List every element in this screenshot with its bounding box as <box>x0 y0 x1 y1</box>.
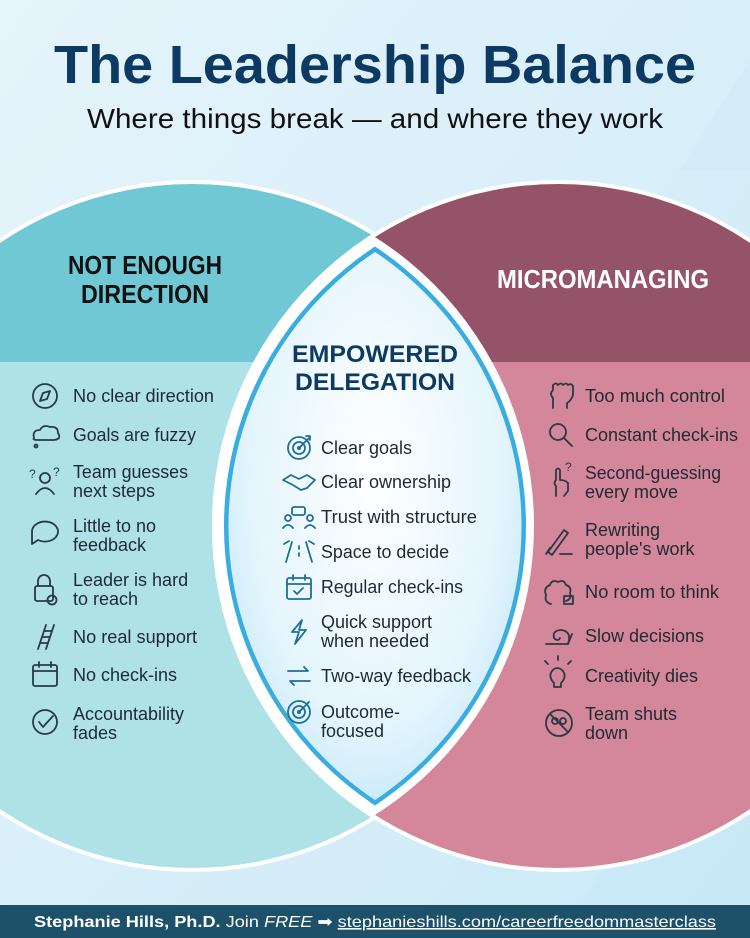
list: not enough direction <box>29 384 214 743</box>
list: micromanaging: down <box>585 723 628 743</box>
text: DIRECTION <box>81 279 209 309</box>
list: not enough direction: to reach <box>73 589 138 609</box>
list: not enough direction: Goals are fuzzy <box>73 425 196 445</box>
list: empowered delegation: Regular check-ins <box>321 577 463 597</box>
text: DELEGATION <box>295 369 455 396</box>
list: not enough direction: Team guesses <box>73 462 188 482</box>
list: not enough direction: ? <box>53 465 60 479</box>
list: micromanaging: Second-guessing <box>585 463 721 483</box>
footer: Stephanie Hills, Ph.D. Join FREE ➡ stephanieshills.com/careerfreedommasterclass <box>34 914 716 931</box>
panel: not enough direction circle <box>0 180 375 872</box>
list: empowered delegation: Trust with structure <box>321 507 477 527</box>
list: not enough direction: No check-ins <box>73 665 177 685</box>
list: empowered delegation: Quick support <box>321 612 432 632</box>
list: not enough direction: ? <box>29 467 36 481</box>
list: empowered delegation: Outcome- <box>321 702 400 722</box>
list: micromanaging: every move <box>585 482 678 502</box>
list: not enough direction: next steps <box>73 481 155 501</box>
list: micromanaging: Constant check-ins <box>585 425 738 445</box>
list: empowered delegation: Clear ownership <box>321 472 451 492</box>
list: not enough direction: feedback <box>73 535 147 555</box>
list: empowered delegation: Space to decide <box>321 542 449 562</box>
panel: empowered delegation lens <box>212 235 534 817</box>
list: micromanaging: Rewriting <box>585 520 660 540</box>
list: micromanaging: Too much control <box>585 386 725 406</box>
list: empowered delegation: focused <box>321 721 384 741</box>
list: not enough direction: Leader is hard <box>73 570 188 590</box>
title: The Leadership Balance <box>54 35 696 95</box>
list: empowered delegation: Two-way feedback <box>321 666 472 686</box>
list: not enough direction: No clear direction <box>73 386 214 406</box>
list: not enough direction: Little to no <box>73 516 156 536</box>
list: micromanaging: Team shuts <box>585 704 677 724</box>
list: micromanaging: Slow decisions <box>585 626 704 646</box>
heading: micromanaging: MICROMANAGING <box>497 264 709 294</box>
list: empowered delegation <box>283 436 477 741</box>
list: micromanaging: people's work <box>585 539 695 559</box>
list: not enough direction: Accountability <box>73 704 184 724</box>
list: not enough direction: No real support <box>73 627 197 647</box>
list: micromanaging: Creativity dies <box>585 666 698 686</box>
list: empowered delegation: when needed <box>320 631 429 651</box>
subtitle: Where things break — and where they work <box>87 103 664 134</box>
panel: micromanaging circle <box>212 180 750 872</box>
heading: not enough direction: NOT ENOUGH <box>68 250 222 280</box>
list: empowered delegation: Clear goals <box>321 438 412 458</box>
heading: empowered delegation: EMPOWERED <box>292 341 458 368</box>
list: micromanaging <box>545 384 738 743</box>
list: not enough direction: fades <box>73 723 117 743</box>
list: micromanaging: No room to think <box>585 582 720 602</box>
list: micromanaging: ? <box>565 460 572 474</box>
footer <box>0 905 750 938</box>
